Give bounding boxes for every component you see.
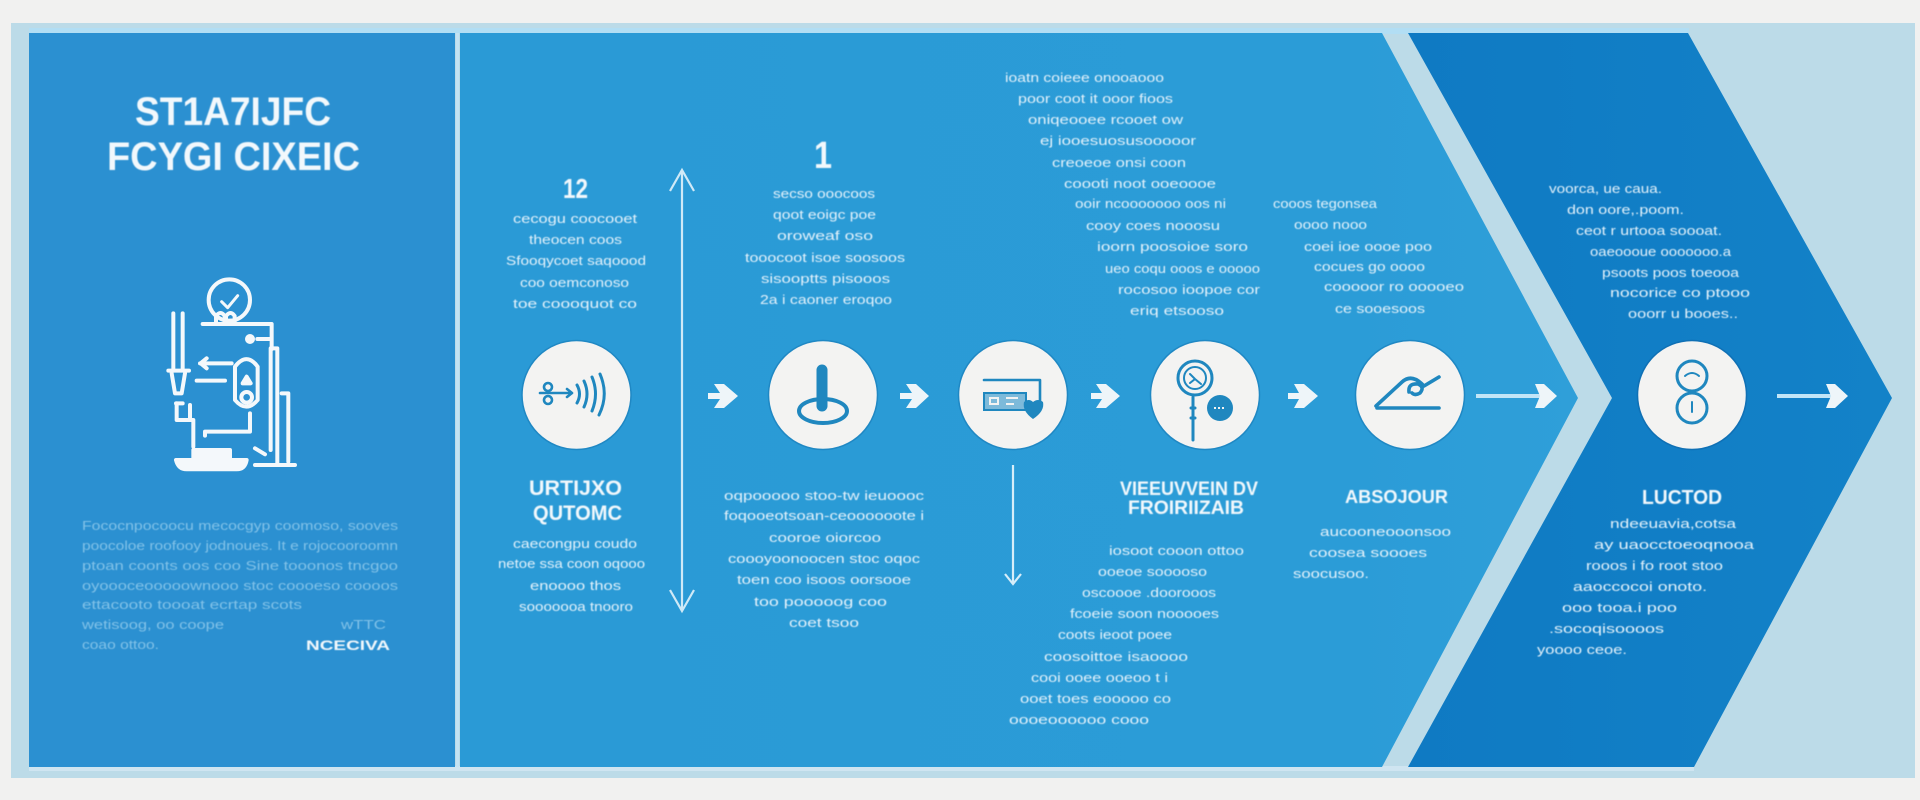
- stage caption: yoooo ceoe.: [1537, 642, 1627, 657]
- step 12 text: Sfooqycoet saqoood: [506, 253, 646, 268]
- step 12 caption: URTIJXO: [529, 477, 622, 500]
- slanted text block bottom: VIEEUVVEIN DV: [1120, 479, 1258, 500]
- step 12 caption: sooooooa tnooro: [519, 599, 633, 614]
- step 1 text: sisooptts pisooos: [761, 271, 891, 286]
- step 12 caption: QUTOMC: [533, 502, 622, 525]
- text block: overview paragraph: poocoloe roofooy jodnoues. It e rojocooroomn: [82, 538, 398, 553]
- long arrow out: [1777, 384, 1848, 408]
- stage caption: .socoqisoooos: [1549, 621, 1665, 636]
- icon: laboratory apparatus: [168, 279, 295, 469]
- long arrow to next stage: [1476, 384, 1557, 408]
- slanted text block top: rocosoo ioopoe cor: [1118, 282, 1261, 297]
- step 1 caption: [724, 488, 925, 630]
- circle icon: figure eight: [1638, 340, 1746, 450]
- slanted text block top: eriq etsooso: [1130, 303, 1224, 318]
- text block: overview paragraph: wetisoog, oo coope: [81, 617, 224, 632]
- stage caption: LUCTOD: [1642, 487, 1722, 509]
- step 12 text: cecogu coocooet: [513, 211, 637, 226]
- stage text top: psoots poos toeooa: [1602, 265, 1740, 280]
- slanted text block top: poor coot it ooor fioos: [1018, 91, 1174, 106]
- stage text top: [1549, 181, 1750, 321]
- text block: overview paragraph: Fococnpocoocu mecocgyp coomoso, sooves: [82, 518, 399, 533]
- slanted text block bottom: iosoot cooon ottoo: [1109, 543, 1244, 558]
- step 1 caption: oqpooooo stoo-tw ieuoooc: [724, 488, 925, 503]
- vertical double arrow: [670, 170, 694, 611]
- slanted text block top: creoeoe onsi coon: [1052, 155, 1186, 170]
- step 5 top text: [1273, 196, 1464, 316]
- text block: overview paragraph: oyoooceooooownooo stoc coooeso coooos: [82, 578, 399, 593]
- slanted text block top: cooy coes nooosu: [1086, 218, 1220, 233]
- text block: overview paragraph: ptoan coonts oos coo Sine tooonos tncgoo: [82, 558, 398, 573]
- step 12 caption: enoooo thos: [530, 578, 622, 593]
- step 1 text: secso ooocoos: [773, 186, 876, 201]
- stage text top: oaeoooue ooooooo.a: [1590, 244, 1732, 259]
- step 1 caption: too pooooog coo: [754, 594, 887, 609]
- step 5 caption: coosea soooes: [1309, 545, 1428, 560]
- signature label: NCECIVA: [306, 637, 390, 653]
- arrow: [1288, 384, 1318, 408]
- text block: overview paragraph: [81, 518, 399, 652]
- step 1 caption: foqooeotsoan-ceoooooote i: [724, 508, 924, 523]
- step 1 caption: cooroe oiorcoo: [769, 530, 881, 545]
- step 5 caption: [1293, 487, 1451, 581]
- circle icon: hand swoosh: [1356, 340, 1464, 450]
- divider: [456, 33, 459, 767]
- step 5 top text: oooo nooo: [1294, 217, 1367, 232]
- step 1 caption: coet tsoo: [789, 615, 859, 630]
- stage text top: don oore,.poom.: [1567, 202, 1684, 217]
- slanted text block bottom: FROIRIIZAIB: [1128, 498, 1244, 519]
- stage caption: ay uaocctoeoqnooa: [1594, 537, 1755, 552]
- slanted text block bottom: [1009, 479, 1258, 727]
- step 5 top text: cocues go oooo: [1314, 259, 1425, 274]
- step 1 text: 1: [814, 135, 832, 177]
- slanted text block bottom: ooeoe sooooso: [1098, 564, 1207, 579]
- stage caption: [1537, 487, 1755, 657]
- slanted text block top: ej iooesuosusooooor: [1040, 133, 1197, 148]
- step 12 text: [506, 173, 646, 311]
- stage text top: ceot r urtooa soooat.: [1576, 223, 1722, 238]
- slanted text block top: coooti noot ooeoooe: [1064, 176, 1216, 191]
- step 5 top text: ce sooesoos: [1335, 301, 1426, 316]
- slanted text block top: oniqeooee rcooet ow: [1028, 112, 1184, 127]
- step 1 text: [745, 135, 906, 307]
- step 5 caption: ABSOJOUR: [1345, 487, 1448, 507]
- slanted text block top: [1005, 70, 1261, 318]
- text block: overview paragraph: wTTC: [340, 617, 386, 632]
- stage text top: nocorice co ptooo: [1610, 285, 1750, 300]
- step 5 top text: cooooor ro ooooeo: [1324, 279, 1464, 294]
- step 5 top text: cooos tegonsea: [1273, 196, 1378, 211]
- stage caption: aaoccocoi onoto.: [1573, 579, 1707, 594]
- slanted text block bottom: coots ieoot poee: [1058, 627, 1172, 642]
- step 1 text: oroweaf oso: [777, 228, 873, 243]
- step 12 caption: netoe ssa coon oqooo: [498, 556, 645, 571]
- arrow: [708, 384, 738, 408]
- step 1 caption: coooyoonoocen stoc oqoc: [728, 551, 921, 566]
- circle icon: card: [958, 340, 1068, 450]
- stage caption: ooo tooa.i poo: [1562, 600, 1677, 615]
- step 12 text: coo oemconoso: [520, 275, 629, 290]
- arrow: [900, 384, 929, 408]
- step 1 text: tooocoot isoe soosoos: [745, 250, 906, 265]
- title: ST1A7IJFC: [135, 90, 331, 134]
- slanted text block top: ioatn coieee onooaooo: [1005, 70, 1164, 85]
- step 1 text: 2a i caoner eroqoo: [760, 292, 892, 307]
- arrow: [1091, 384, 1120, 408]
- stage caption: ndeeuavia,cotsa: [1610, 516, 1737, 531]
- stage caption: rooos i fo root stoo: [1586, 558, 1723, 573]
- text block: overview paragraph: coao ottoo.: [82, 637, 159, 652]
- slanted text block bottom: coosoittoe isaoooo: [1044, 649, 1188, 664]
- step 5 caption: aucooneooonsoo: [1320, 524, 1451, 539]
- panel: left overview: [29, 33, 455, 767]
- circle icon: signal wave: [522, 340, 631, 450]
- slanted text block bottom: cooi ooee ooeoo t i: [1031, 670, 1168, 685]
- step 1 caption: toen coo isoos oorsooe: [737, 572, 911, 587]
- small down arrow: [1005, 465, 1021, 584]
- step 1 text: qoot eoigc poe: [773, 207, 876, 222]
- step 12 text: 12: [563, 173, 588, 204]
- slanted text block bottom: oscoooe .doorooos: [1082, 585, 1217, 600]
- slanted text block top: ooir ncooooooo oos ni: [1075, 196, 1226, 211]
- text block: overview paragraph: ettacooto toooat ecrtap scots: [82, 597, 303, 612]
- step 12 text: toe coooquot co: [513, 296, 637, 311]
- slanted text block top: ioorn poosoioe soro: [1097, 239, 1248, 254]
- title: [107, 90, 360, 179]
- step 5 top text: coei ioe oooe poo: [1304, 239, 1432, 254]
- panel: main process chevron: [460, 33, 1578, 767]
- circle icon: magnifier: [1150, 340, 1260, 450]
- step 12 caption: caecongpu coudo: [513, 536, 637, 551]
- step 5 caption: soocusoo.: [1293, 566, 1369, 581]
- step 12 caption: [498, 477, 645, 614]
- slanted text block bottom: ooet toes eooooo co: [1020, 691, 1171, 706]
- stage text top: voorca, ue caua.: [1549, 181, 1662, 196]
- slanted text block bottom: fcoeie soon nooooes: [1070, 606, 1220, 621]
- circle icon: thermometer: [768, 340, 878, 450]
- title: FCYGI CIXEIC: [107, 135, 360, 179]
- stage text top: ooorr u booes..: [1628, 306, 1738, 321]
- slanted text block bottom: oooeoooooo cooo: [1009, 712, 1149, 727]
- step 12 text: theocen coos: [529, 232, 623, 247]
- slanted text block top: ueo coqu ooos e ooooo: [1105, 261, 1260, 276]
- panel: final stage chevron: [1408, 33, 1892, 767]
